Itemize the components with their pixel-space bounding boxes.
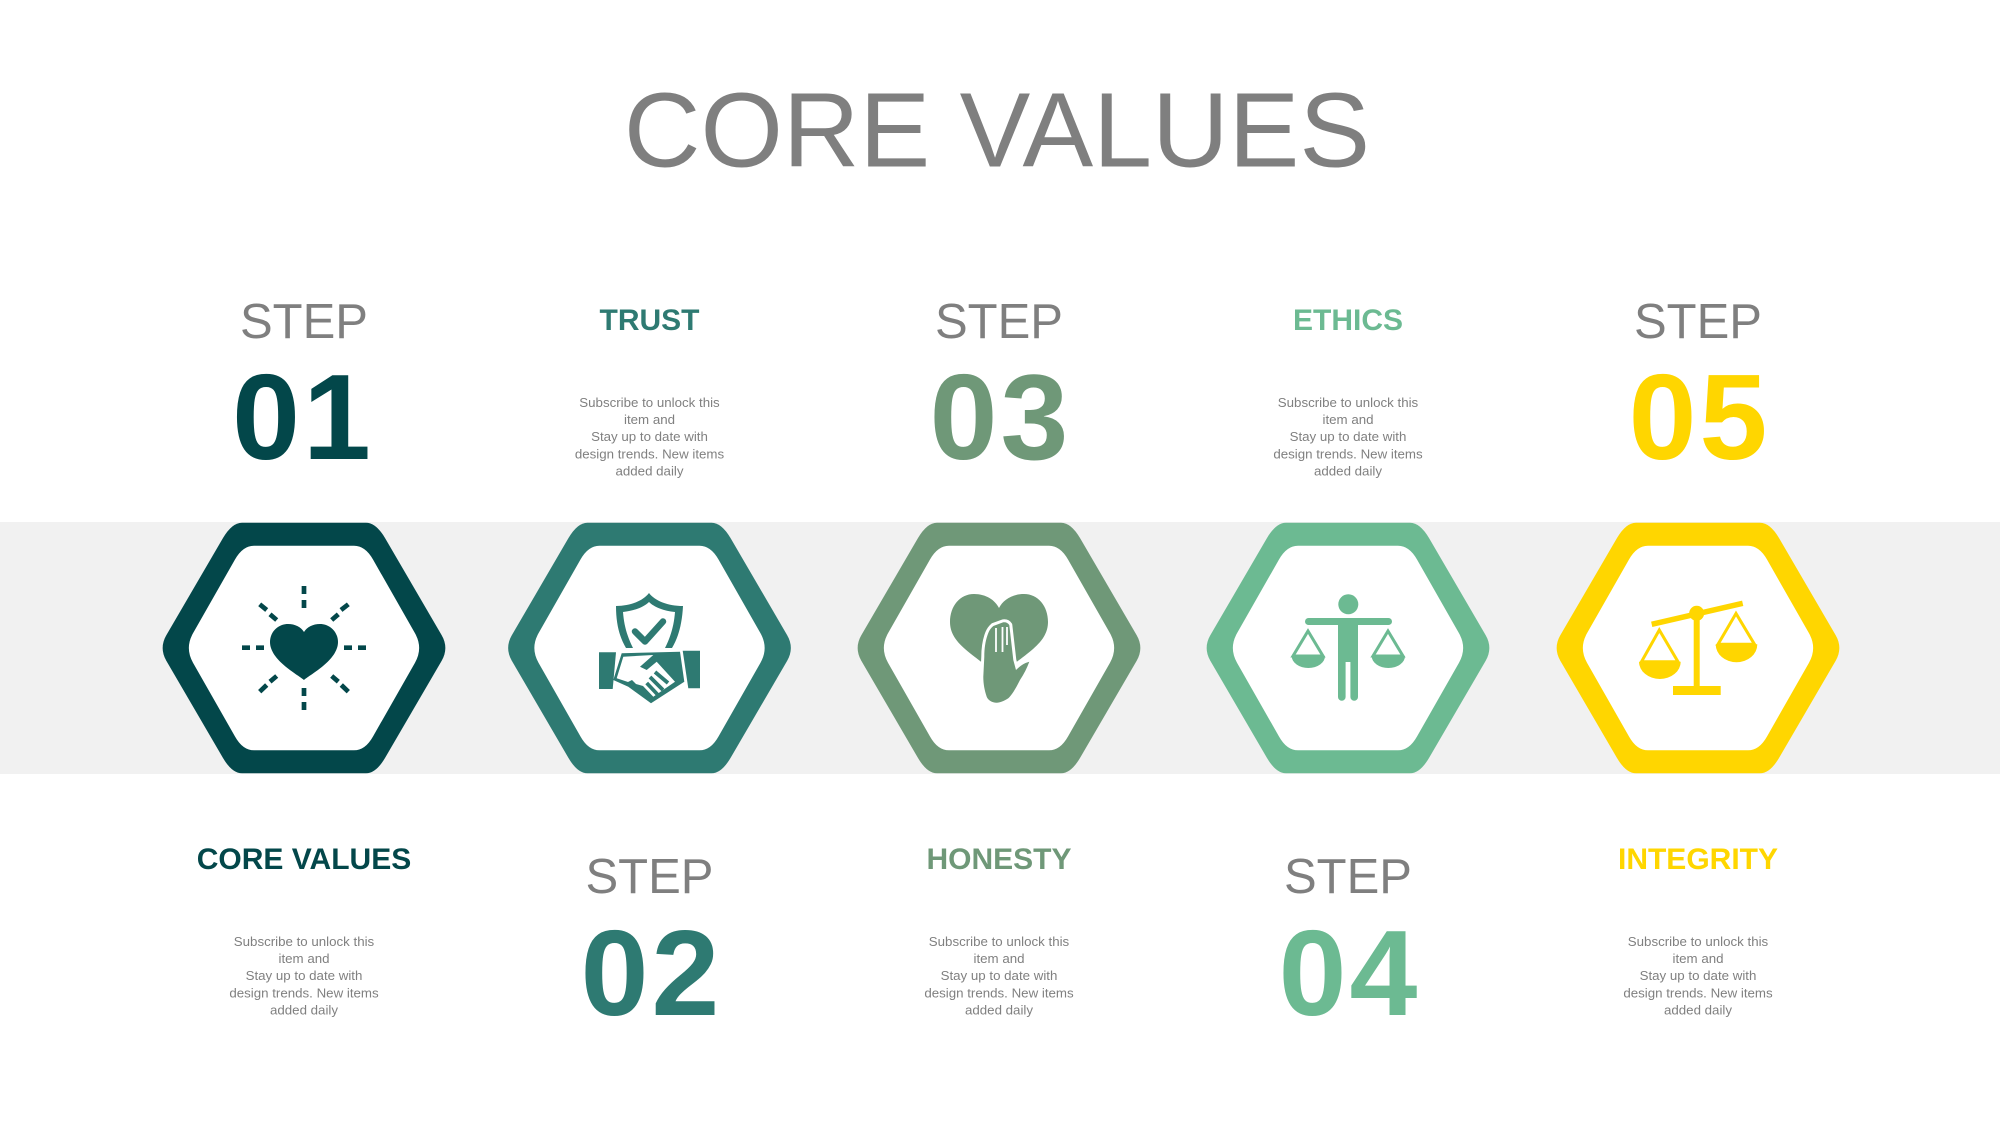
description 5: item and [1672, 951, 1724, 966]
description 3: design trends. New items [924, 985, 1074, 1000]
description 5: design trends. New items [1623, 985, 1773, 1000]
panel: step 02 trust [508, 304, 791, 1041]
label: honesty: HONESTY [926, 843, 1072, 876]
label: ethics: ETHICS [1293, 304, 1403, 337]
panel: step 04 ethics [1207, 304, 1489, 1041]
description 1: item and [278, 951, 330, 966]
panel: step 01 core values [163, 295, 445, 1017]
description 5: Subscribe to unlock this [1628, 934, 1769, 949]
icon: person with scales [1292, 594, 1405, 701]
step 03 heading: 03 [930, 349, 1071, 485]
step 04 heading: STEP [1284, 850, 1412, 904]
label: integrity: INTEGRITY [1618, 843, 1778, 876]
description 4: item and [1322, 412, 1374, 427]
hexagon 4 [1207, 523, 1489, 773]
icon: hand on heart [950, 594, 1048, 703]
step 05 heading: STEP [1634, 295, 1762, 349]
description 3: Stay up to date with [941, 968, 1057, 983]
label: trust: TRUST [600, 304, 700, 337]
description 4: design trends. New items [1273, 446, 1423, 461]
icon: shield and handshake [599, 593, 700, 703]
icon: glowing heart [242, 586, 366, 710]
description 4: Stay up to date with [1290, 429, 1406, 444]
hexagon 2 [508, 523, 791, 773]
step 03 heading: STEP [935, 295, 1063, 349]
description 3: item and [974, 951, 1024, 966]
description 2: item and [624, 412, 675, 427]
description 3: added daily [965, 1002, 1033, 1017]
hexagon 5 [1557, 523, 1839, 773]
step 01 heading: STEP [240, 295, 368, 349]
description 2: Stay up to date with [591, 429, 708, 444]
hexagon 3 [858, 523, 1140, 773]
label: core values: CORE VALUES [197, 843, 411, 876]
description 1: Stay up to date with [246, 968, 362, 983]
description 2: Subscribe to unlock this [579, 395, 720, 410]
panel: step 03 honesty [858, 295, 1140, 1017]
step 02 heading: 02 [581, 905, 722, 1041]
step 02 heading: STEP [586, 850, 713, 904]
panel: step 05 integrity [1557, 295, 1839, 1017]
step 04 heading: 04 [1279, 905, 1420, 1041]
hexagon 1 [163, 523, 445, 773]
background band [0, 522, 2000, 774]
icon: balance scale [1639, 603, 1757, 695]
description 4: Subscribe to unlock this [1278, 395, 1419, 410]
description 2: added daily [615, 463, 684, 478]
description 1: Subscribe to unlock this [234, 934, 375, 949]
description 1: design trends. New items [229, 985, 379, 1000]
description 3: Subscribe to unlock this [929, 934, 1070, 949]
description 4: added daily [1314, 463, 1382, 478]
description 2: design trends. New items [575, 446, 724, 461]
description 5: Stay up to date with [1640, 968, 1756, 983]
step 05 heading: 05 [1629, 349, 1770, 485]
description 5: added daily [1664, 1002, 1732, 1017]
title: CORE VALUES [624, 72, 1370, 190]
description 1: added daily [270, 1002, 338, 1017]
step 01 heading: 01 [232, 349, 374, 485]
